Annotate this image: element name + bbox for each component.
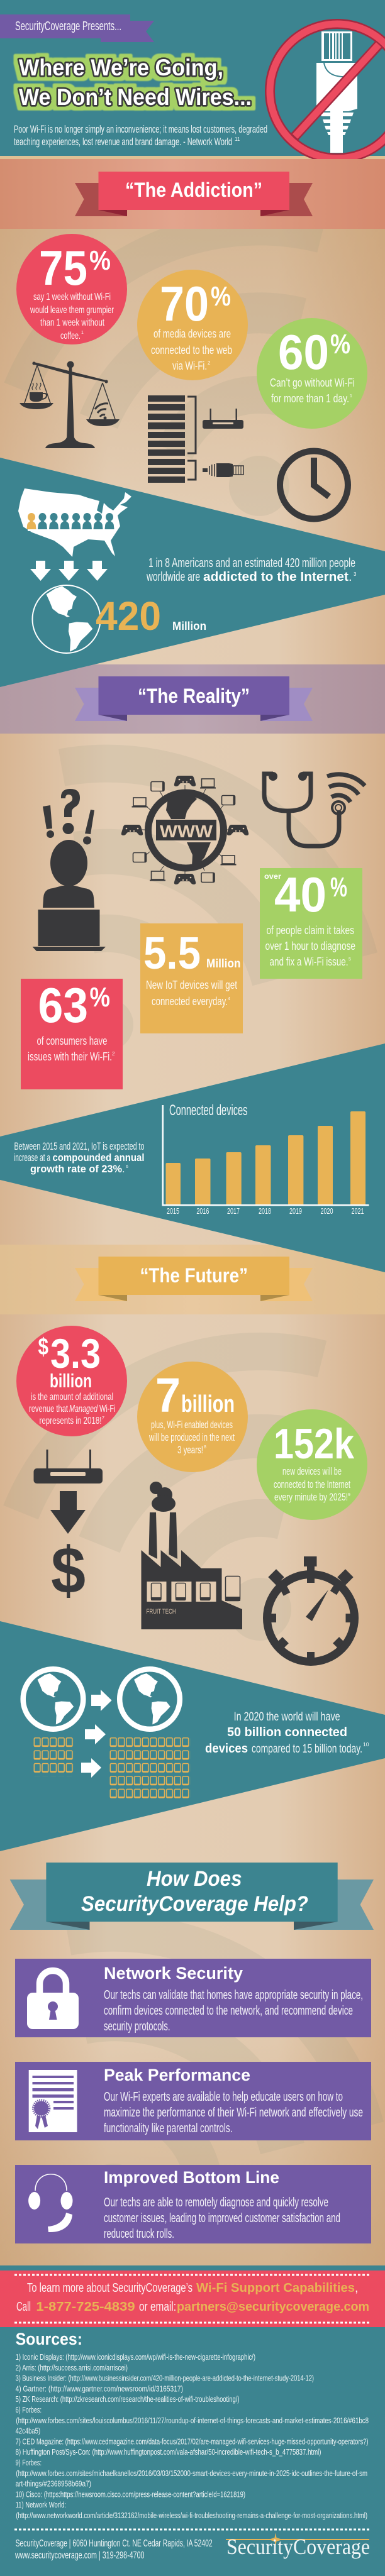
text: 50 billion connected devices: devices [205, 1742, 248, 1756]
bar chart: connected devices: 2016 [196, 1207, 209, 1216]
icon: www globe with devices [121, 776, 248, 884]
ribbon: the reality [75, 676, 313, 721]
title [19, 55, 252, 110]
ribbon: how does securitycoverage help [10, 1863, 374, 1930]
footer address [14, 2538, 213, 2561]
panel: call to action: Wi-Fi Support Capabilities [196, 2281, 355, 2295]
text: addicted to the internet: worldwide are [146, 570, 200, 584]
text: growth rate: 6 [126, 1165, 128, 1169]
bar chart: connected devices: 2017 [227, 1207, 240, 1216]
stat: over 40 percent: 5 [349, 957, 351, 962]
panel: network security: Network Security [104, 1964, 243, 1983]
icon: network plug [316, 33, 357, 153]
icon: globes with devices [23, 1669, 190, 1802]
text: growth rate: compounded annual [53, 1152, 145, 1164]
stat: over 40 percent: 40 [274, 867, 326, 922]
stat: 7 billion: 7 [155, 1368, 181, 1423]
text: addicted to the internet [146, 556, 357, 584]
icon: no wires sign [270, 24, 385, 158]
stat: over 40 percent: and fix a Wi-Fi issue. [269, 955, 349, 968]
stat: over 40 percent: over 1 hour to diagnose [265, 939, 355, 952]
icon: certificate [29, 2070, 77, 2132]
icon: router to dollars [34, 1450, 103, 1607]
ribbon: the addiction: “The Addiction” [125, 179, 262, 201]
stat: 70 percent: connected to the web [151, 343, 232, 356]
panel: call to action: To learn more about SecurityCoverage’s [27, 2281, 192, 2295]
stat: over 40 percent: % [330, 872, 347, 903]
stat: 5.5 million: 4 [228, 997, 230, 1001]
bar chart: connected devices: 2021 [351, 1207, 364, 1216]
stat: 5.5 million: 5.5 [143, 928, 201, 979]
ribbon: presents [0, 14, 154, 42]
panel: call to action: partners@securitycoverage.com [177, 2300, 369, 2314]
bar chart: connected devices: 2018 [259, 1207, 271, 1216]
panel: call to action: Call [16, 2300, 31, 2314]
stat: 5.5 million: Million [206, 957, 240, 971]
stat: 3.3 billion: Managed [69, 1404, 98, 1414]
text: 50 billion connected devices [205, 1710, 369, 1756]
stat: 60 percent: for more than 1 day. [271, 392, 349, 405]
icon: US map with people [18, 488, 131, 557]
stat: 152k: 152k [274, 1420, 354, 1468]
ribbon: the addiction [75, 172, 313, 216]
stat: 60 percent: % [330, 329, 350, 360]
stat: 70 percent [137, 270, 248, 380]
stat: 7 billion: billion [181, 1391, 235, 1417]
band: the reality [0, 664, 385, 734]
ribbon: presents: SecurityCoverage Presents... [15, 19, 121, 33]
stat: over 40 percent: over [264, 872, 281, 881]
source list: 9) Forbes: [16, 2458, 42, 2467]
icon: stethoscope with wifi [264, 772, 365, 846]
panel: network security [15, 1959, 371, 2037]
text: addicted to the internet: 3 [354, 571, 357, 577]
icon: scale [20, 361, 120, 448]
bar chart: connected devices: 2015 [167, 1207, 179, 1216]
icon: factory: FRUIT TECH [147, 1608, 176, 1616]
footer address: www.securitycoverage.com | 319-298-4700 [14, 2550, 145, 2561]
stat: 63 percent: % [89, 982, 110, 1013]
stat: 75 percent: 1 [81, 331, 84, 335]
title: We Don’t Need Wires... [19, 84, 252, 110]
panel: network security: security protocols. [104, 2020, 170, 2034]
stat: 70 percent: via Wi-Fi. [172, 359, 207, 372]
panel: connected devices growth [0, 1043, 385, 1272]
icon: stopwatch [267, 1556, 355, 1662]
ribbon: the future [75, 1257, 313, 1301]
icon: factory [141, 1482, 242, 1629]
title: Where We’re Going, [19, 55, 223, 80]
source list: art-things/#2368958b69a7) [16, 2480, 91, 2489]
icon: headset [28, 2174, 73, 2232]
stat: 3.3 billion: $ [38, 1334, 48, 1360]
panel: call to action: 1-877-725-4839 [36, 2300, 135, 2314]
source list: 11) Network World: [16, 2501, 66, 2509]
panel: 50 billion devices [0, 1621, 385, 1851]
stat: 70 percent: of media devices are [153, 327, 231, 340]
source list: 4) Gartner: (http://www.gartner.com/newsroom/id/3165317) [16, 2384, 183, 2393]
stat: 420 million: 420 [96, 593, 161, 639]
band: the future [0, 1245, 385, 1314]
icon: www globe with devices: WWW [160, 822, 213, 841]
stat: 152k [257, 1409, 367, 1520]
panel: peak performance: Peak Performance [104, 2066, 250, 2084]
intro text [14, 123, 267, 148]
stat: 63 percent: 63 [38, 977, 88, 1033]
intro text: 11 [235, 136, 240, 142]
stat: 7 billion: plus, Wi-Fi enabled devices [151, 1419, 233, 1431]
footer address: SecurityCoverage | 6060 Huntington Ct. NE Cedar Rapids, IA 52402 [16, 2538, 213, 2549]
stat: 3.3 billion: is the amount of additional [31, 1392, 113, 1402]
icon: devices and router [148, 395, 243, 483]
stat: 152k: every minute by 2025! [274, 1492, 348, 1503]
text: addicted to the internet: addicted to the Internet [203, 570, 349, 584]
ribbon: the future: “The Future” [140, 1264, 248, 1287]
stat: 3.3 billion [16, 1326, 127, 1436]
stat: 5.5 million: New IoT devices will get [146, 978, 237, 991]
stat: 3.3 billion: represents in 2018! [39, 1416, 102, 1426]
stat: 7 billion: 3 years! [177, 1445, 203, 1456]
icon: router to dollars: $ [51, 1534, 86, 1607]
stat: 5.5 million [140, 923, 243, 1033]
stat: 5.5 million: connected everyday. [152, 994, 228, 1008]
stat: 3.3 billion: 3.3 [50, 1330, 101, 1377]
icon: clock [280, 451, 348, 519]
stat: 63 percent: of consumers have [36, 1034, 107, 1047]
panel: improved bottom line: Improved Bottom Line [104, 2168, 279, 2187]
stat: 60 percent: Can’t go without Wi-Fi [270, 376, 355, 389]
stat: 75 percent: say 1 week without Wi-Fi [33, 292, 111, 302]
stat: 420 million: Million [172, 620, 206, 632]
stat: 75 percent: would leave them grumpier [30, 305, 114, 316]
stat: over 40 percent [260, 867, 362, 979]
stat: 7 billion: 8 [204, 1445, 206, 1450]
icon: padlock [27, 1971, 79, 2029]
source list: 6) Forbes: [16, 2406, 42, 2414]
panel: call to action [0, 2271, 385, 2327]
stat: 7 billion: will be produced in the next [148, 1432, 235, 1443]
stat: 152k: new devices will be [282, 1466, 342, 1477]
text: growth rate [14, 1141, 145, 1175]
text: 50 billion connected devices: 10 [363, 1741, 369, 1748]
panel: peak performance [15, 2062, 371, 2140]
icon: globe [33, 585, 101, 653]
ribbon: the reality: “The Reality” [138, 685, 250, 707]
source list [16, 2353, 369, 2520]
stat: 60 percent: 60 [278, 324, 329, 380]
stat: 420 million [96, 593, 206, 639]
text: 50 billion connected devices: 50 billion connected [227, 1726, 347, 1739]
stat: 60 percent: 1 [350, 394, 352, 399]
bar chart: connected devices: 2020 [321, 1207, 333, 1216]
panel: improved bottom line: reduced truck rolls. [104, 2227, 174, 2241]
stat: over 40 percent: of people claim it takes [267, 923, 354, 937]
panel: header [0, 0, 385, 159]
icon: confused person at laptop [33, 789, 106, 951]
footer strip [0, 2265, 385, 2271]
panel: 420 million [0, 458, 385, 687]
stat: 3.3 billion: 7 [102, 1416, 104, 1421]
bar chart: connected devices: Connected devices [169, 1102, 248, 1119]
icon: down arrows [30, 561, 108, 581]
stat: 75 percent: % [89, 245, 111, 276]
text: growth rate: Between 2015 and 2021, IoT is expected to [14, 1141, 145, 1152]
logo: securitycoverage: SecurityCoverage [226, 2535, 370, 2559]
stat: 152k: 9 [348, 1493, 350, 1497]
stat: 75 percent: than 1 week without [40, 317, 104, 328]
stat: 70 percent: % [211, 281, 231, 312]
stat: 75 percent: coffee. [60, 331, 81, 341]
source list: 10) Cisco: (https:https://newsroom.cisco.com/press-release-content?articleId=1621819) [16, 2490, 245, 2499]
panel: sources [0, 2327, 385, 2576]
ribbon: how does securitycoverage help: SecurityCoverage Help? [81, 1892, 308, 1916]
stat: 63 percent: issues with their Wi-Fi. [28, 1050, 112, 1063]
stat: 3.3 billion: Wi-Fi [99, 1404, 116, 1414]
icon: right arrows [81, 1690, 112, 1778]
panel: sources: Sources: [16, 2330, 82, 2348]
ribbon: how does securitycoverage help: How Does [147, 1867, 242, 1891]
text: growth rate: growth rate of 23% [30, 1164, 122, 1175]
panel: call to action: , [355, 2281, 359, 2295]
stat: 63 percent [21, 977, 123, 1089]
text: growth rate: . [122, 1164, 125, 1175]
stat: 7 billion [137, 1362, 248, 1472]
bar chart: connected devices [162, 1102, 369, 1216]
panel: call to action: or email: [139, 2300, 176, 2314]
source list: 5) ZK Research: (http://zkresearch.com/research/the-realities-of-wifi-troubleshooting/) [16, 2395, 239, 2404]
source list: 1) Iconic Displays: (http://www.iconicdisplays.com/wp/wifi-is-the-new-cigarette-infographic/) [16, 2353, 255, 2362]
stat: 75 percent: 75 [39, 240, 87, 295]
panel: improved bottom line [15, 2165, 371, 2243]
text: 50 billion connected devices: In 2020 the world will have [234, 1710, 340, 1724]
stat: 3.3 billion: revenue that [29, 1404, 68, 1414]
source list: 42c4ba5) [16, 2427, 40, 2436]
text: addicted to the internet: . [349, 570, 352, 584]
stat: 63 percent: 2 [112, 1051, 115, 1057]
panel: peak performance: functionality like parental controls. [104, 2122, 233, 2135]
band: the addiction [0, 159, 385, 229]
stat: 70 percent: 2 [208, 360, 211, 366]
bar chart: connected devices: 2019 [289, 1207, 302, 1216]
stat: 70 percent: 70 [160, 276, 209, 331]
intro text: teaching experiences, lost revenue and brand damage. - Network World [14, 136, 232, 148]
stat: 3.3 billion: billion [50, 1370, 92, 1392]
text: growth rate: increase at a [14, 1152, 50, 1164]
stat: 75 percent [16, 234, 127, 344]
stat: 60 percent [257, 318, 367, 429]
source list: 2) Arris: (http://success.arrisi.com/arriscei) [16, 2364, 128, 2372]
